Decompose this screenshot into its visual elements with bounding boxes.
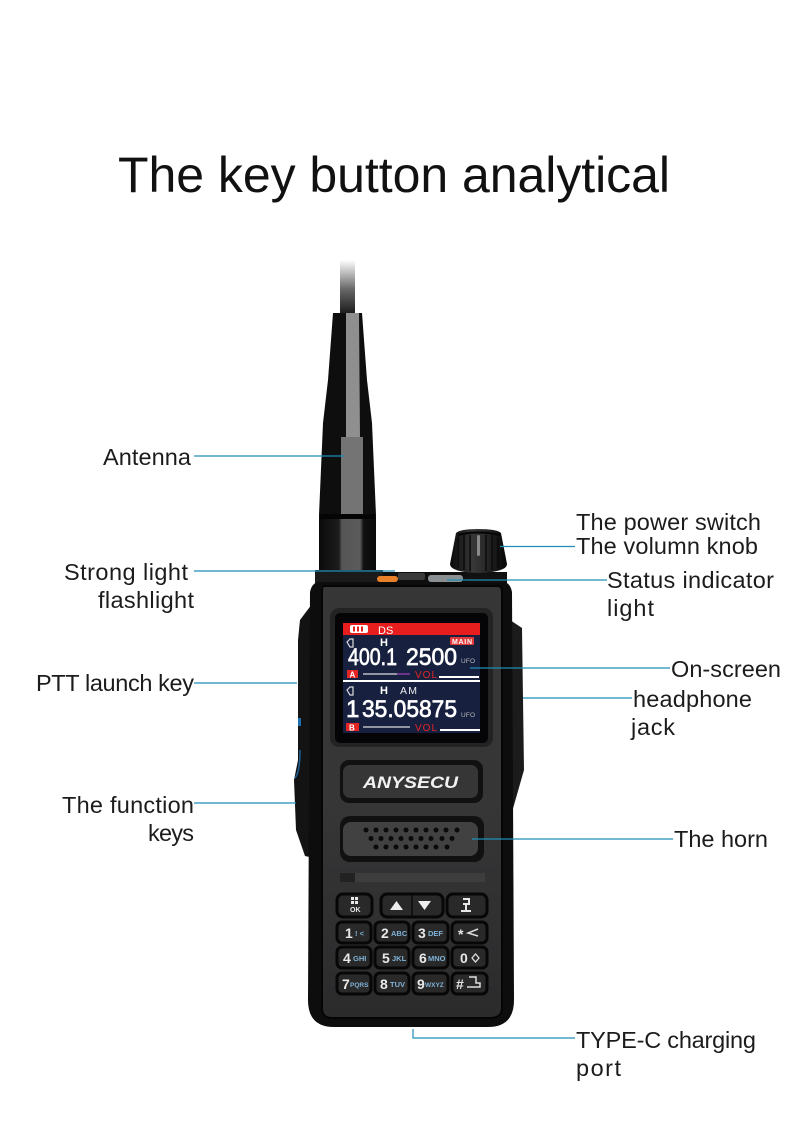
- label: type-c charging port: TYPE-C charging: [576, 1027, 756, 1053]
- side PTT grip: [294, 604, 314, 858]
- label: headphone jack: [523, 686, 752, 740]
- label: type-c charging port: [413, 1027, 756, 1081]
- keypad: GHI: [353, 954, 366, 963]
- label: the function keys: keys: [148, 820, 194, 846]
- display screen: 400.1: [348, 644, 397, 671]
- label: type-c charging port: port: [576, 1055, 621, 1081]
- display screen: B: [349, 724, 355, 732]
- display screen: UFO: [461, 712, 475, 719]
- keypad: 1: [345, 925, 353, 941]
- keypad: *: [458, 926, 464, 942]
- keypad: DEF: [428, 929, 443, 938]
- keypad: JKL: [392, 954, 407, 963]
- brand plate: [340, 760, 483, 803]
- label: strong light flashlight: flashlight: [98, 587, 194, 613]
- label: power switch and volume knob: [500, 509, 761, 559]
- keypad: [337, 894, 487, 994]
- label: status indicator light: Status indicator: [607, 567, 774, 593]
- keypad: PQRS: [350, 982, 369, 989]
- keypad: 4: [343, 950, 351, 966]
- keypad: 9: [417, 976, 425, 992]
- keypad: 0: [460, 950, 468, 966]
- front face: [322, 586, 502, 1018]
- label: strong light flashlight: Strong light: [64, 559, 188, 585]
- display screen: 2500: [406, 644, 457, 671]
- label: power switch and volume knob: The volumn knob: [576, 533, 758, 559]
- display screen: VOL: [415, 670, 437, 681]
- keypad: TUV: [390, 980, 405, 989]
- label: the function keys: The function: [62, 792, 194, 818]
- display screen: MAIN: [452, 639, 472, 646]
- display screen: H: [380, 637, 388, 649]
- display screen: DS: [378, 625, 393, 637]
- display screen: VOL: [415, 723, 437, 734]
- label: the horn: The horn: [674, 826, 768, 852]
- radio body: [308, 582, 514, 1027]
- keypad: 8: [380, 976, 388, 992]
- keypad: 5: [382, 950, 390, 966]
- antenna: [319, 260, 376, 571]
- display screen: H: [380, 685, 388, 697]
- volume knob: [450, 529, 507, 584]
- label: PTT launch key: PTT launch key: [36, 670, 194, 696]
- indicator strip: [340, 873, 485, 882]
- label: antenna: Antenna: [103, 444, 192, 470]
- display screen: 1: [346, 696, 359, 723]
- keypad: 2: [381, 925, 389, 941]
- label: strong light flashlight: [64, 559, 395, 613]
- right side jack cover: [510, 620, 524, 812]
- keypad: #: [456, 976, 464, 992]
- label: headphone jack: headphone: [633, 686, 752, 712]
- keypad: 3: [418, 925, 426, 941]
- display screen: [330, 608, 493, 747]
- keypad: ABC: [391, 929, 408, 938]
- display screen: A: [350, 670, 356, 680]
- keypad: ! <: [355, 929, 365, 938]
- keypad: 7: [342, 976, 350, 992]
- keypad: WXYZ: [425, 982, 444, 989]
- label: status indicator light: light: [607, 595, 654, 621]
- display screen: AM: [400, 685, 417, 697]
- keypad: MNO: [428, 954, 446, 963]
- speaker grille: [340, 816, 484, 862]
- title: The key button analytical: [118, 147, 670, 203]
- label: status indicator light: [447, 567, 774, 621]
- top buttons: [315, 570, 465, 584]
- label: headphone jack: jack: [630, 714, 675, 740]
- keypad: OK: [350, 907, 360, 914]
- walkie-talkie radio: [294, 260, 524, 1027]
- keypad: 6: [419, 950, 427, 966]
- display screen: UFO: [461, 658, 475, 665]
- display screen: 35.05875: [362, 696, 457, 723]
- label: on-screen: On-screen: [671, 656, 781, 682]
- label: the function keys: [62, 792, 296, 846]
- label: power switch and volume knob: The power switch: [576, 509, 761, 535]
- brand plate: ANYSECU: [362, 773, 459, 792]
